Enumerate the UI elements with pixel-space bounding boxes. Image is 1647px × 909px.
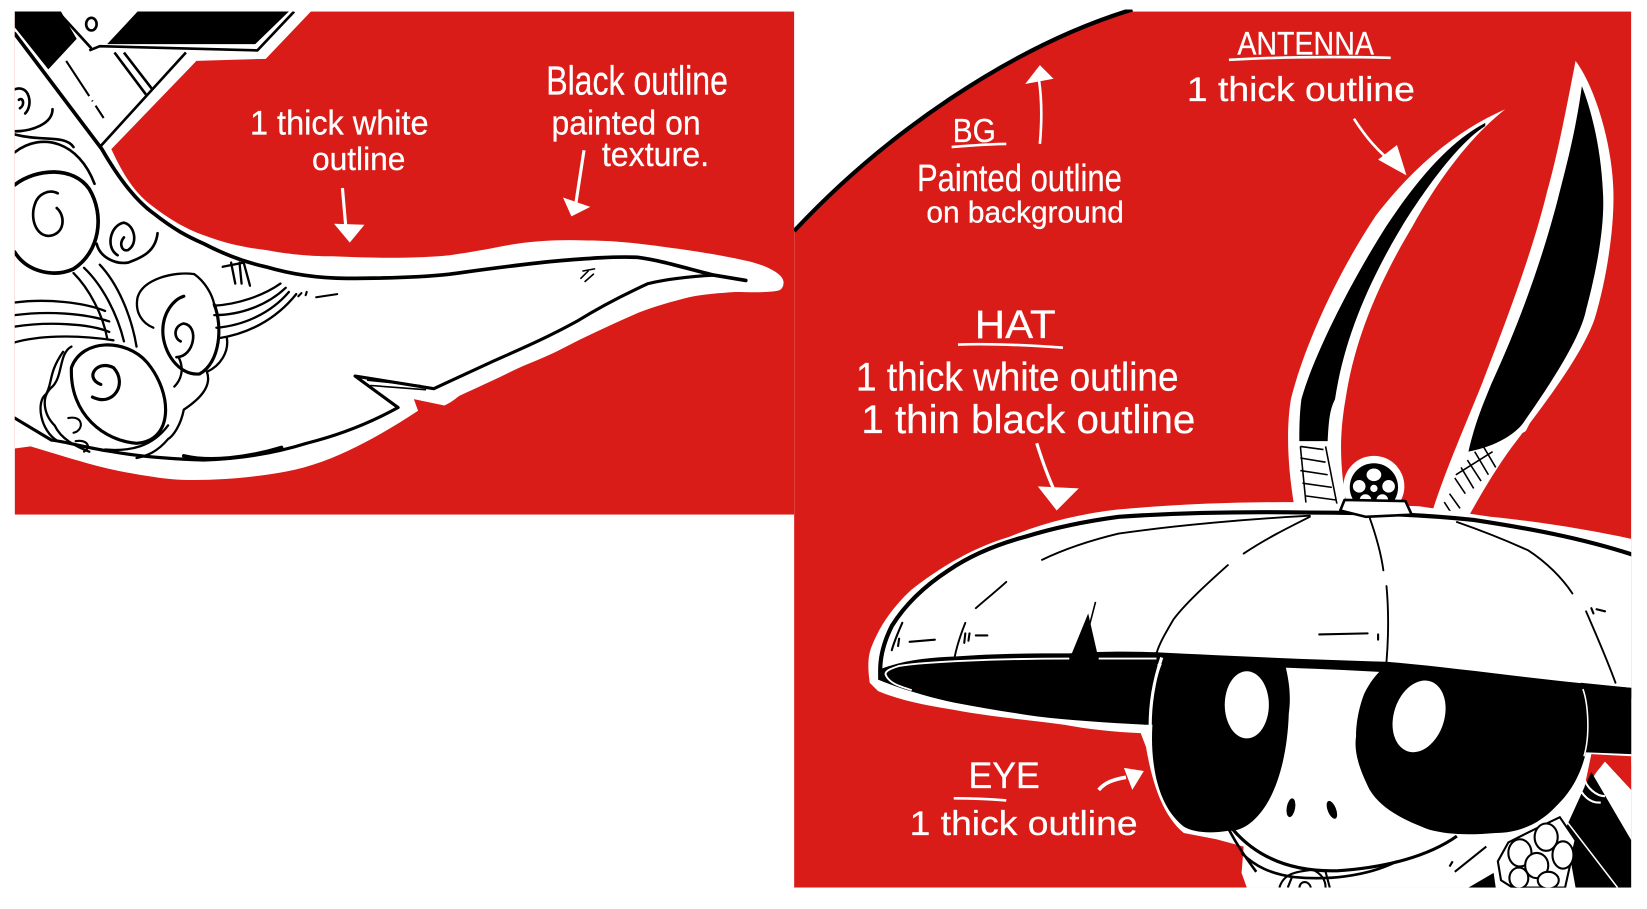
annotation: BG: Painted outline	[917, 158, 1122, 200]
blade scrollwork clouds	[15, 88, 296, 458]
left eye	[1152, 660, 1290, 832]
right eye	[1356, 668, 1589, 834]
panel: hat and antenna detail	[794, 9, 1632, 889]
annotation: antenna: 1 thick outline	[1187, 71, 1415, 109]
annotation: 1 thick white outline: 1 thick white	[250, 104, 429, 142]
annotation: 1 thick white outline	[250, 104, 429, 243]
annotation: BG: BG	[953, 113, 996, 150]
annotation: BG	[917, 65, 1124, 230]
annotation: hat	[856, 303, 1195, 510]
face head	[1150, 658, 1589, 871]
hat dome	[880, 512, 1632, 683]
hat brim underside	[878, 652, 1632, 754]
nose	[1286, 798, 1338, 819]
hat knob	[1340, 456, 1412, 517]
blade black contour	[15, 34, 746, 460]
panel: blade outline detail	[15, 12, 794, 515]
annotation: antenna: ANTENNA	[1237, 26, 1374, 62]
right antenna	[1431, 61, 1613, 517]
annotation: 1 thick white outline: outline	[312, 141, 405, 177]
annotation: black outline painted on texture: texture.	[602, 136, 709, 174]
annotation: black outline painted on texture: painted on	[551, 104, 701, 142]
annotation: BG: on background	[926, 196, 1124, 230]
collar and scaled armour	[1229, 762, 1631, 889]
hat white outline	[868, 502, 1631, 888]
annotation: black outline painted on texture	[546, 58, 728, 216]
annotation: eye: EYE	[968, 755, 1040, 796]
background white corner with painted outline	[794, 9, 1132, 231]
annotation: antenna	[1187, 26, 1415, 175]
blade top structure	[15, 12, 294, 147]
blade white outline	[15, 12, 784, 480]
annotation: hat: 1 thick white outline	[856, 356, 1179, 400]
annotation: hat: 1 thin black outline	[861, 398, 1195, 442]
left antenna	[1288, 109, 1505, 517]
annotation: eye	[912, 762, 1144, 836]
annotation: black outline painted on texture: Black outline	[546, 58, 728, 104]
annotation: eye: 1 thick outline	[910, 805, 1138, 843]
annotation: hat: HAT	[975, 303, 1056, 347]
